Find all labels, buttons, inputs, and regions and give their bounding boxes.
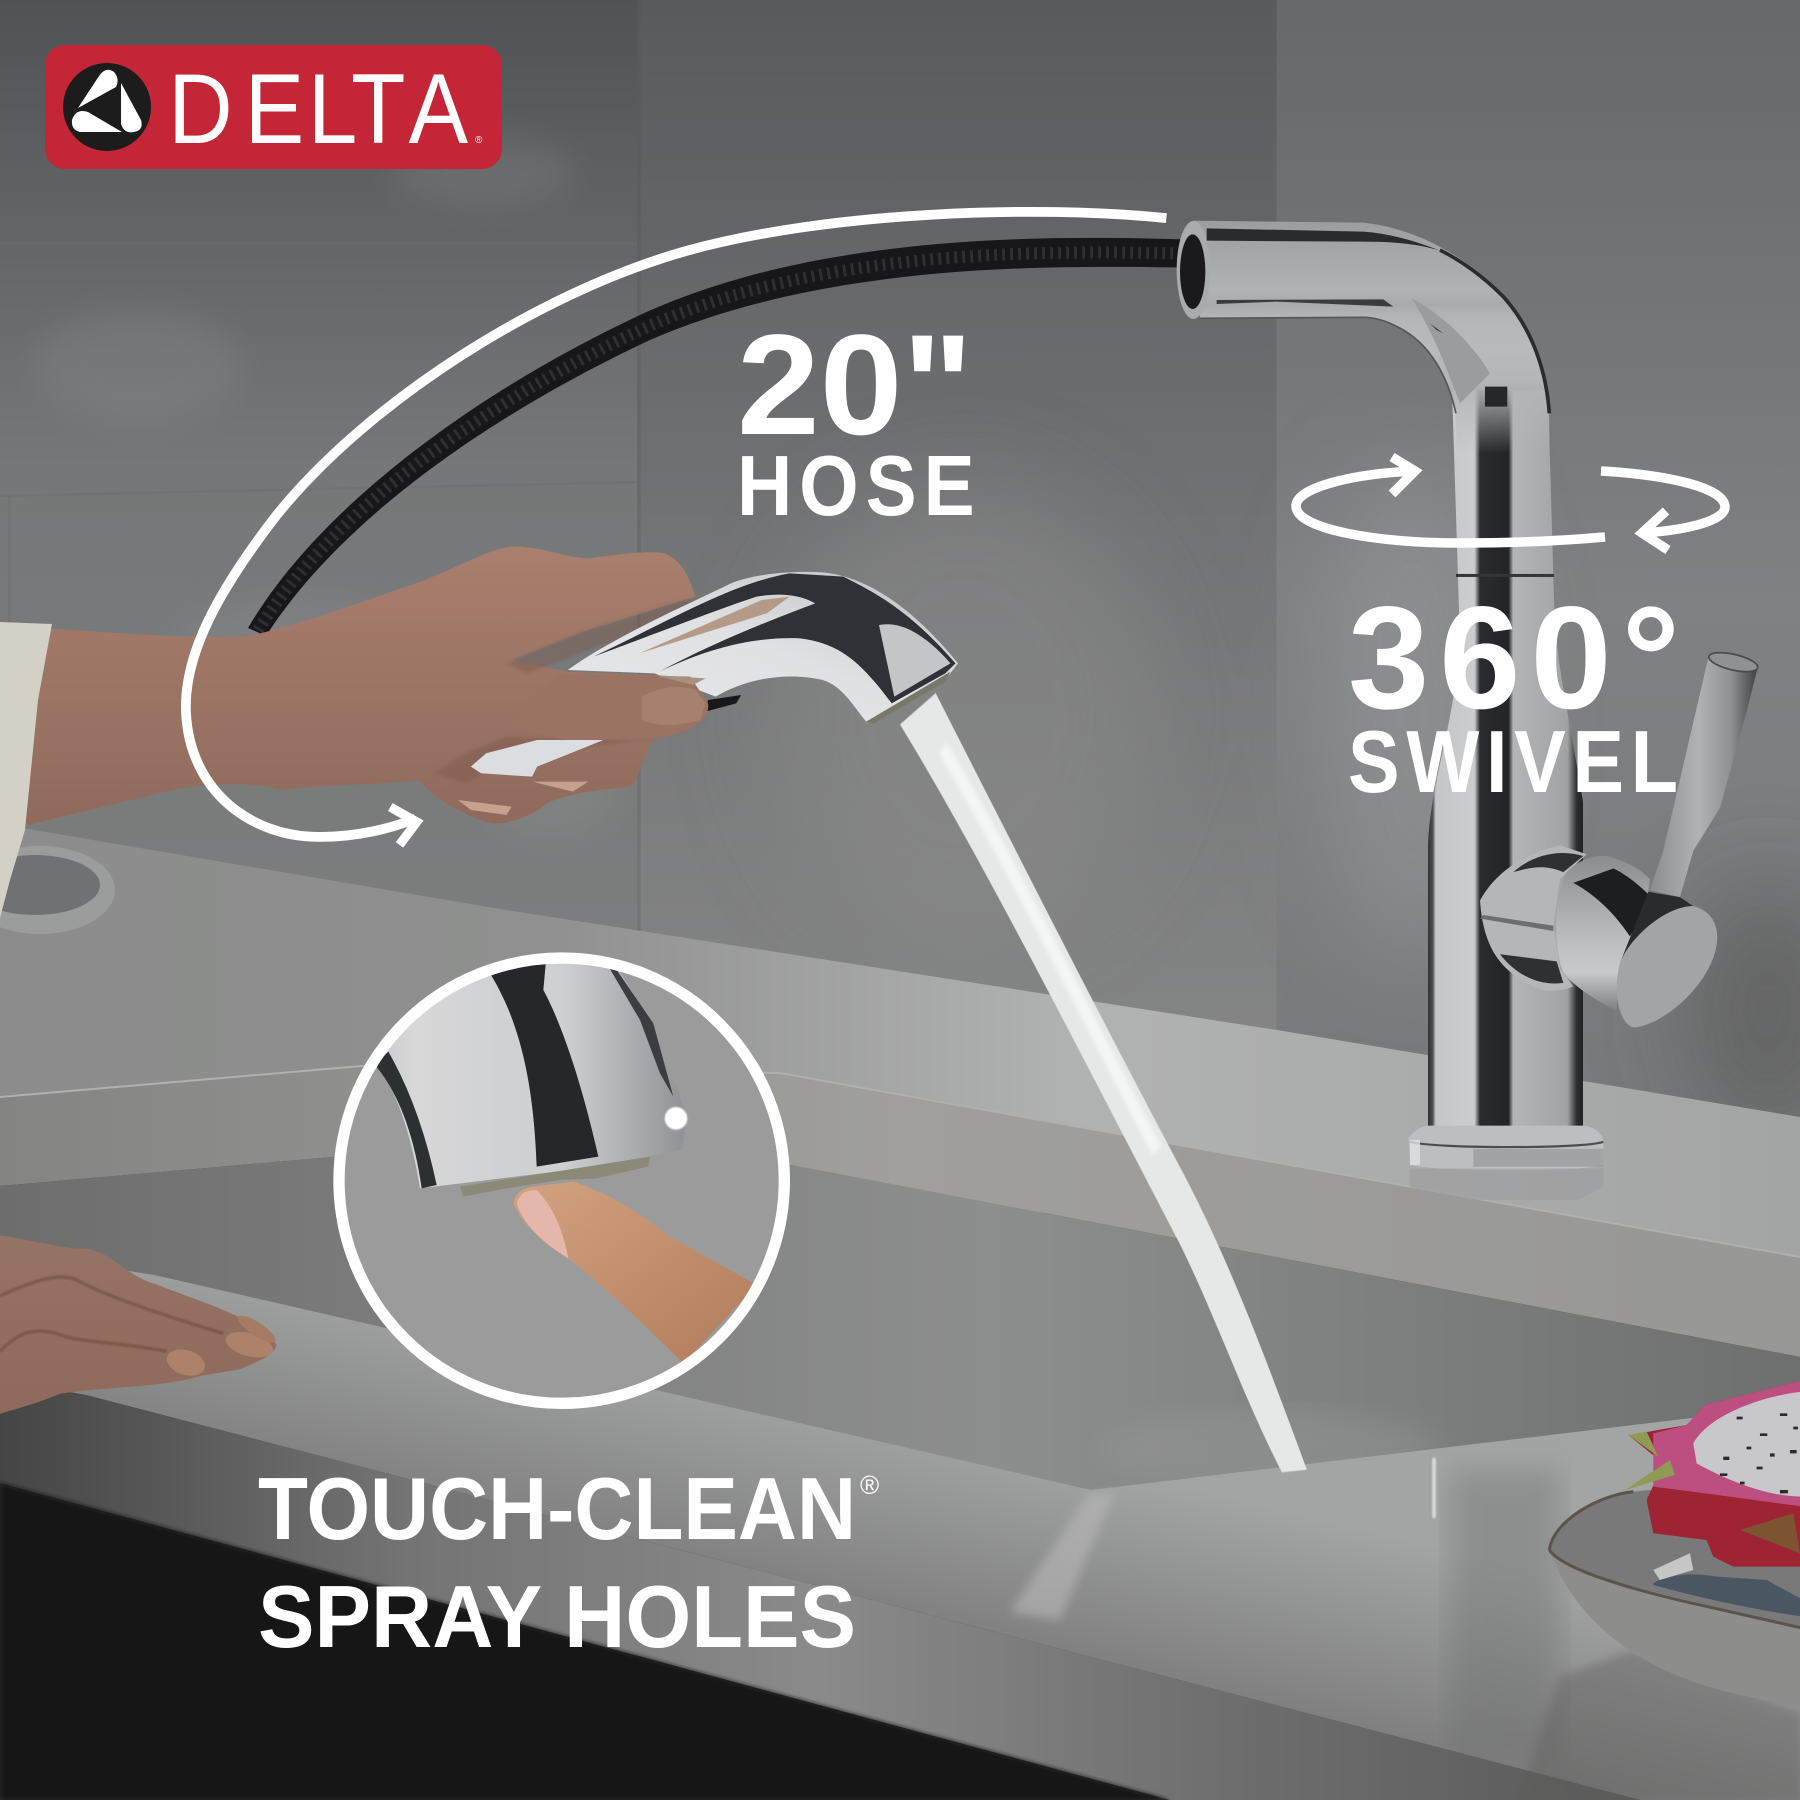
label: 360 degree swivel: SWIVEL xyxy=(1348,712,1678,811)
countertop behind sink xyxy=(0,824,1800,1280)
bowl xyxy=(1549,1550,1800,1708)
hose opening xyxy=(1177,221,1210,319)
walls xyxy=(0,0,1800,1205)
label: touch-clean spray holes: TOUCH-CLEAN xyxy=(258,1459,856,1558)
logo emblem xyxy=(63,63,151,151)
dragon fruit xyxy=(1628,1380,1800,1567)
fingernails xyxy=(532,782,588,792)
spray tip chrome xyxy=(377,953,687,1188)
fruit plate xyxy=(1517,1380,1800,1800)
hand resting on counter xyxy=(0,1235,278,1414)
inset background xyxy=(339,958,784,1403)
logo wordmark: DELTA xyxy=(168,54,468,164)
inset ring xyxy=(339,958,784,1403)
arrow: swivel rotation xyxy=(1296,457,1725,550)
hose xyxy=(248,238,1205,636)
faucet base xyxy=(1408,1126,1603,1170)
thumb xyxy=(507,673,708,740)
sink rim xyxy=(0,1066,1800,1357)
label: touch-clean spray holes: SPRAY HOLES xyxy=(258,1567,856,1666)
faucet xyxy=(1177,221,1759,1200)
front countertop xyxy=(0,1250,1800,1800)
arm and hand holding sprayer xyxy=(23,547,958,826)
handle lever xyxy=(1650,655,1758,897)
brand logo: ® xyxy=(475,135,483,146)
front counter edge xyxy=(0,1380,1640,1800)
hand shadows xyxy=(435,598,690,783)
fingernails xyxy=(224,1328,274,1362)
sleeve xyxy=(0,622,52,918)
counter reflections xyxy=(1010,1458,1560,1760)
sprayer grip xyxy=(471,740,603,777)
plate at left xyxy=(0,846,115,934)
collar xyxy=(1456,574,1554,577)
water stream xyxy=(900,693,1307,1472)
handle cylinder xyxy=(1556,856,1650,1011)
fingertip xyxy=(513,1182,757,1363)
plate shadow xyxy=(1517,1650,1800,1800)
label: 20 inch hose: HOSE xyxy=(737,439,975,534)
arm and hand xyxy=(23,547,708,826)
sprayer head xyxy=(568,572,958,722)
label: touch-clean spray holes: ® xyxy=(860,1470,879,1500)
fingernail xyxy=(517,1190,568,1258)
arrow: hose length xyxy=(186,212,1166,845)
brand logo xyxy=(45,45,502,169)
faucet column xyxy=(1428,390,1583,1134)
label: touch-clean spray holes xyxy=(258,1459,879,1666)
spray nozzles xyxy=(460,1157,650,1197)
inset: touch-clean spray holes xyxy=(339,953,784,1403)
label: 360 degree swivel xyxy=(1348,576,1680,811)
sink basin xyxy=(0,1157,1800,1492)
spray face xyxy=(866,672,950,723)
cabinet xyxy=(0,1483,1170,1800)
label: 20 inch hose xyxy=(737,306,975,534)
label: 20 inch hose: 20" xyxy=(737,306,973,465)
blueberries xyxy=(1653,1574,1800,1617)
faucet spout xyxy=(1193,221,1550,453)
label: 360 degree swivel: 360° xyxy=(1348,576,1680,739)
handle hub xyxy=(1480,845,1587,991)
handle end cap xyxy=(1620,892,1717,963)
